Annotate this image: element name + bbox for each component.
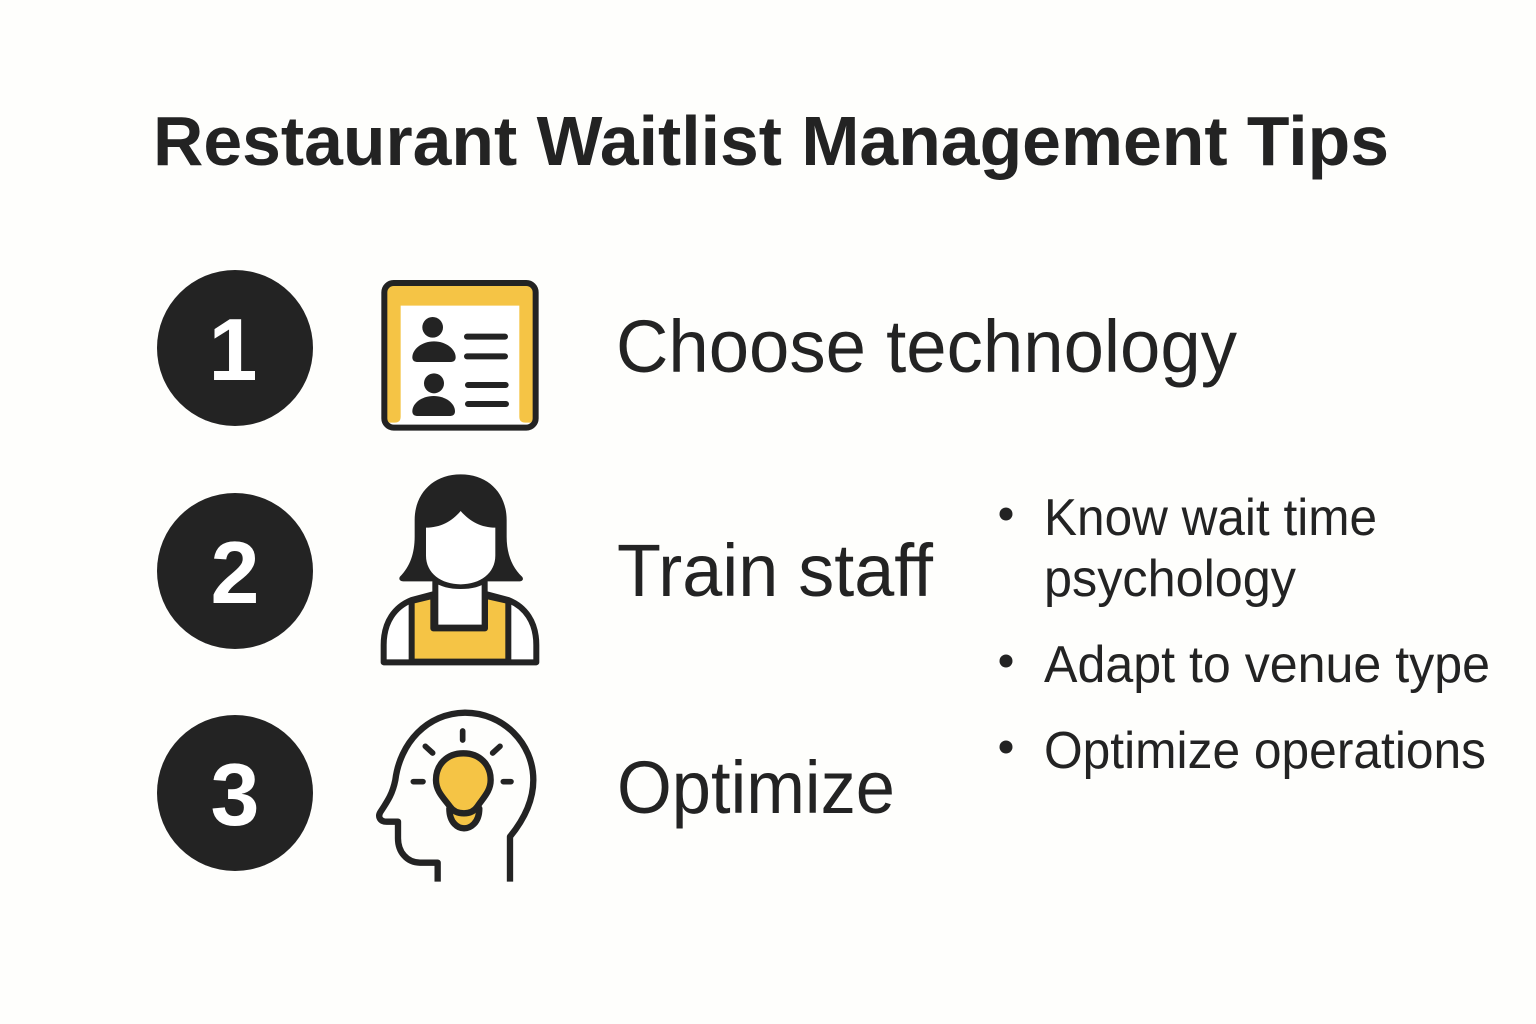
heading: train staff: Train staff xyxy=(617,529,933,612)
step 2 number badge xyxy=(157,493,313,649)
title: Restaurant Waitlist Management Tips xyxy=(153,102,1389,180)
bullet: know wait time psychology xyxy=(1000,489,1377,608)
icon: staff member xyxy=(384,474,536,662)
bullet: optimize operations: Optimize operations xyxy=(1044,722,1486,780)
bullet list xyxy=(1000,489,1490,780)
icon: waitlist card xyxy=(384,283,536,428)
step 1 number badge xyxy=(157,270,313,426)
step 1 number badge: 1 xyxy=(209,300,257,399)
icon: head with light bulb xyxy=(379,713,533,882)
step 3 number badge xyxy=(157,715,313,871)
bullet: know wait time psychology: psychology xyxy=(1044,550,1296,608)
step 2 number badge: 2 xyxy=(211,523,259,622)
bullet: know wait time psychology: Know wait time xyxy=(1044,489,1377,547)
heading: optimize: Optimize xyxy=(617,746,895,829)
bullet: adapt to venue type: Adapt to venue type xyxy=(1044,636,1490,694)
step 3 number badge: 3 xyxy=(211,745,259,844)
heading: choose technology: Choose technology xyxy=(616,305,1237,388)
